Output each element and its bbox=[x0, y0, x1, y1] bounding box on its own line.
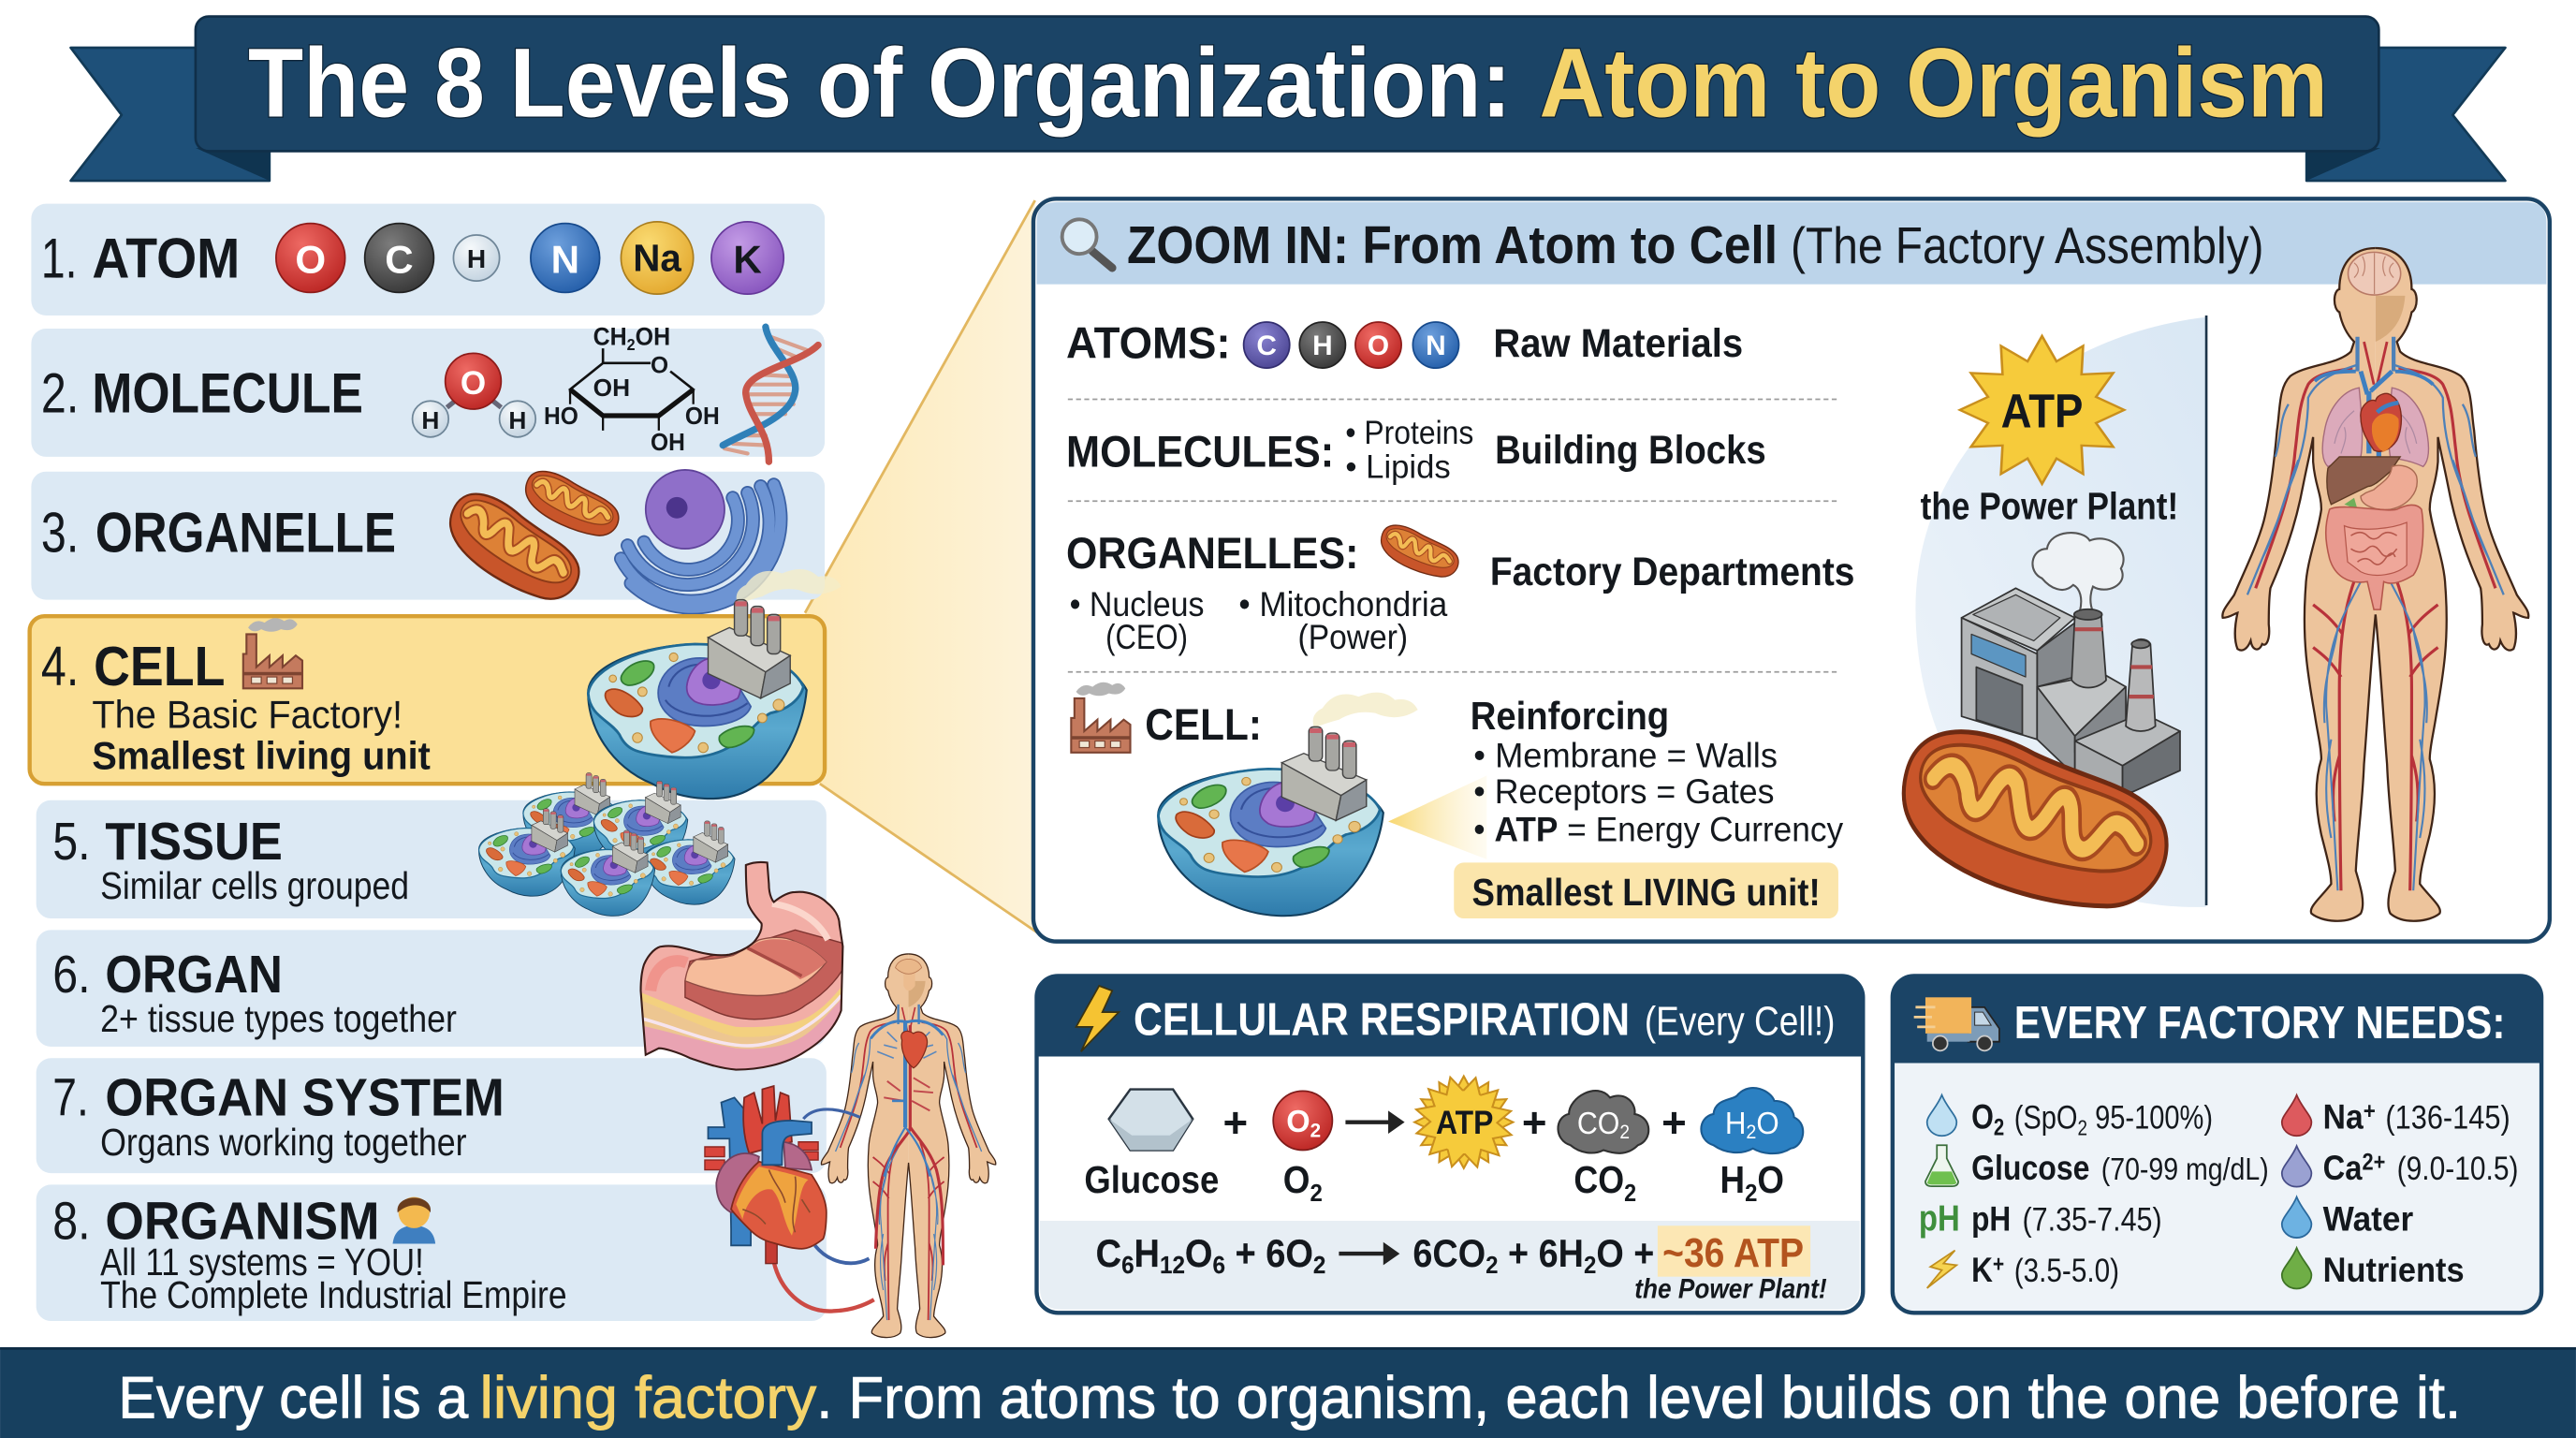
item: nutrients bbox=[2282, 1248, 2465, 1289]
icon: magnifier bbox=[1062, 219, 1112, 268]
row: organelles: (Power) bbox=[1298, 618, 1408, 656]
item: pH: (7.35-7.45) bbox=[2022, 1202, 2162, 1239]
formula: 6CO bbox=[1412, 1232, 1492, 1275]
row: molecules: • Lipids bbox=[1345, 449, 1451, 486]
formula: + 6H bbox=[1499, 1232, 1584, 1275]
smoke cloud bbox=[2032, 533, 2124, 611]
icon: ATP burst: ATP bbox=[1436, 1105, 1493, 1141]
level 6: organ: 6. bbox=[52, 945, 91, 1004]
item: pH: pH bbox=[1971, 1200, 2011, 1239]
glucose ring: OH bbox=[636, 322, 670, 351]
ATP star: ATP bbox=[2001, 384, 2083, 437]
factory building bbox=[1962, 588, 2180, 792]
icon: CO2 cloud: CO bbox=[1577, 1107, 1624, 1141]
illustration: stomach bbox=[633, 855, 846, 1077]
row: organelles: • Nucleus bbox=[1070, 585, 1204, 624]
glucose ring: OH bbox=[685, 402, 720, 430]
water molecule: H bbox=[508, 406, 526, 434]
plus signs: + bbox=[1223, 1098, 1248, 1146]
zoom funnel bbox=[805, 200, 1038, 933]
icon: CO2 cloud: 2 bbox=[1619, 1122, 1630, 1143]
item: O2: (SpO bbox=[2014, 1100, 2091, 1137]
icon: CO2 cloud bbox=[1558, 1091, 1648, 1153]
icon: ATP burst bbox=[1404, 1065, 1523, 1180]
icon: person bbox=[393, 1197, 435, 1244]
glucose ring: HO bbox=[544, 402, 578, 430]
row: organelles: ORGANELLES: bbox=[1066, 529, 1358, 579]
item: Na+: + bbox=[2364, 1099, 2376, 1124]
level 8: organism: ORGANISM bbox=[105, 1191, 379, 1250]
level 4: cell: The Basic Factory! bbox=[92, 692, 402, 736]
item: Ca2+ bbox=[2282, 1146, 2519, 1187]
row: atoms bbox=[1066, 319, 1743, 369]
footer text: living factory bbox=[480, 1366, 817, 1431]
formula: 12 bbox=[1160, 1251, 1185, 1279]
ribbon tails bbox=[71, 48, 2505, 181]
level 8: organism: 8. bbox=[52, 1191, 91, 1250]
level 4: cell: CELL bbox=[94, 635, 225, 697]
water molecule: O bbox=[461, 365, 486, 402]
glucose ring: OH bbox=[651, 428, 685, 456]
item: Ca2+: (9.0-10.5) bbox=[2397, 1151, 2519, 1187]
panel: cellular respiration: (Every Cell!) bbox=[1645, 999, 1835, 1045]
title text: The 8 Levels of Organization: bbox=[248, 29, 1512, 139]
plus signs: + bbox=[1522, 1098, 1547, 1146]
labels: O bbox=[1283, 1158, 1312, 1201]
icon: H2O cloud: O bbox=[1756, 1107, 1779, 1141]
icon: H2O cloud bbox=[1701, 1088, 1803, 1153]
row: atoms: C bbox=[1256, 330, 1277, 361]
level 8: organism bbox=[37, 1184, 827, 1321]
header bbox=[1893, 976, 2541, 1064]
formula: the Power Plant! bbox=[1634, 1273, 1827, 1304]
illustration: heart with connectors bbox=[705, 1086, 874, 1312]
level 4: cell: Smallest living unit bbox=[92, 733, 431, 777]
water molecule bbox=[413, 353, 535, 437]
row: organelles bbox=[1066, 521, 1854, 656]
plus signs: + bbox=[1661, 1098, 1687, 1146]
labels: 2 bbox=[1624, 1179, 1636, 1207]
item: glucose: (70-99 mg/dL) bbox=[2101, 1152, 2269, 1187]
row: atoms: O bbox=[1368, 330, 1389, 361]
item: K+: K bbox=[1971, 1251, 1997, 1289]
icon: O2 bbox=[1273, 1091, 1332, 1151]
illustration: cell with factory bbox=[588, 569, 842, 799]
item: water: Water bbox=[2323, 1200, 2413, 1239]
level 3: organelle bbox=[31, 465, 825, 613]
item: K+: + bbox=[1993, 1252, 2004, 1277]
level 2: molecule: 2. bbox=[41, 361, 79, 425]
plus signs bbox=[1223, 1098, 1687, 1146]
level 7: organ system: Organs working together bbox=[100, 1121, 466, 1164]
icon: O2: 2 bbox=[1310, 1120, 1321, 1141]
nucleus and ER bbox=[621, 470, 781, 608]
row: atoms: N bbox=[1426, 330, 1446, 361]
level 8: organism: The Complete Industrial Empire bbox=[100, 1273, 567, 1316]
item: O2: 2 bbox=[1994, 1116, 2004, 1141]
atoms row: C bbox=[385, 237, 414, 281]
panel: zoom in: ZOOM IN: From Atom to Cell bbox=[1127, 215, 1778, 274]
formula: 6 bbox=[1121, 1251, 1134, 1279]
row: cell: Reinforcing bbox=[1471, 694, 1669, 738]
level 5: tissue: 5. bbox=[52, 812, 91, 871]
item: Na+: (136-145) bbox=[2385, 1100, 2510, 1137]
item: Na+: Na bbox=[2323, 1098, 2367, 1137]
item: glucose bbox=[1925, 1145, 2269, 1187]
row: organelles: Factory Departments bbox=[1490, 550, 1854, 594]
level 7: organ system bbox=[37, 1058, 827, 1173]
level 5: tissue: TISSUE bbox=[105, 812, 283, 871]
level 6: organ bbox=[37, 930, 827, 1047]
footer text bbox=[118, 1366, 2461, 1431]
item: pH bbox=[1919, 1199, 2162, 1240]
footer banner bbox=[0, 1347, 2576, 1438]
panel: every factory needs: EVERY FACTORY NEEDS: bbox=[2014, 998, 2505, 1049]
row: cell: • Membrane = Walls bbox=[1473, 737, 1778, 775]
panel: zoom in: (The Factory Assembly) bbox=[1791, 217, 2263, 274]
header bbox=[1036, 976, 1863, 1056]
water molecule: H bbox=[421, 406, 439, 434]
item: K+: (3.5-5.0) bbox=[2014, 1253, 2119, 1289]
level 1: atom bbox=[31, 204, 825, 315]
power plant area bbox=[1884, 315, 2206, 927]
formula: C bbox=[1096, 1232, 1123, 1275]
icon: H2O cloud: 2 bbox=[1746, 1122, 1756, 1143]
level 6: organ: ORGAN bbox=[105, 945, 283, 1004]
row: atoms: H bbox=[1312, 330, 1333, 361]
glucose ring: OH bbox=[593, 374, 630, 402]
item: O2: 2 bbox=[2078, 1116, 2087, 1140]
illustration: organism body bbox=[821, 954, 996, 1338]
item: O2 bbox=[1927, 1095, 2213, 1141]
power plant area: the Power Plant! bbox=[1921, 485, 2178, 528]
icon: truck bbox=[1914, 997, 1999, 1050]
atoms row bbox=[276, 222, 783, 294]
level 5: tissue bbox=[37, 800, 827, 918]
glucose ring: CH bbox=[593, 322, 630, 351]
level 1: atom: 1. bbox=[41, 227, 78, 290]
formula: O + bbox=[1596, 1232, 1654, 1275]
ATP star bbox=[1960, 336, 2124, 484]
illustration: tissue cells bbox=[479, 773, 735, 916]
atoms row: H bbox=[467, 244, 486, 273]
icon: O2: O bbox=[1286, 1105, 1310, 1139]
glucose ring: 2 bbox=[627, 335, 636, 354]
row: atoms: ATOMS: bbox=[1066, 319, 1231, 369]
item: Na+ bbox=[2282, 1095, 2510, 1137]
formula: 6 bbox=[1212, 1251, 1225, 1279]
row: cell: • Receptors = Gates bbox=[1473, 772, 1774, 811]
level 4: cell: 4. bbox=[41, 635, 79, 697]
atoms row: K bbox=[733, 237, 762, 281]
row: organelles: • Mitochondria bbox=[1238, 585, 1448, 624]
labels: 2 bbox=[1745, 1179, 1757, 1207]
illustration: human body bbox=[2222, 248, 2528, 921]
icon: lightning bbox=[1076, 986, 1119, 1051]
formula: 2 bbox=[1486, 1251, 1499, 1279]
level 2: molecule bbox=[31, 322, 825, 462]
labels: CO bbox=[1573, 1158, 1631, 1201]
row: cell: • ATP = Energy Currency bbox=[1473, 811, 1844, 849]
atoms row: O bbox=[295, 237, 326, 281]
glucose ring bbox=[544, 322, 720, 456]
glucose ring: O bbox=[651, 353, 668, 378]
formula: H bbox=[1134, 1232, 1160, 1275]
row: molecules: • Proteins bbox=[1345, 415, 1473, 451]
formula: + 6O bbox=[1225, 1232, 1313, 1275]
formula: ~36 ATP bbox=[1662, 1230, 1804, 1276]
DNA helix bbox=[723, 327, 818, 462]
item: O2: O bbox=[1971, 1098, 1998, 1137]
item: O2: 95-100%) bbox=[2087, 1100, 2213, 1137]
labels: O bbox=[1757, 1158, 1784, 1201]
equation band bbox=[1040, 1221, 1860, 1310]
item: glucose: Glucose bbox=[1971, 1149, 2089, 1187]
row: cell bbox=[1071, 682, 1844, 918]
panel: every factory needs bbox=[1893, 976, 2541, 1313]
atoms row: Na bbox=[633, 237, 681, 280]
labels: 2 bbox=[1310, 1179, 1323, 1207]
level 4: cell bbox=[30, 616, 825, 784]
level 3: organelle: 3. bbox=[41, 501, 79, 565]
row: organelles: (CEO) bbox=[1105, 618, 1188, 656]
callout: smallest living unit: Smallest LIVING unit! bbox=[1472, 871, 1821, 914]
item: nutrients: Nutrients bbox=[2323, 1251, 2465, 1289]
item: Ca2+: 2+ bbox=[2362, 1151, 2385, 1176]
level 3: organelle: ORGANELLE bbox=[95, 501, 396, 565]
item: K+ bbox=[1927, 1251, 2119, 1289]
title banner bbox=[196, 17, 2378, 151]
arrow bbox=[1345, 1110, 1405, 1134]
panel: zoom in bbox=[1033, 198, 2550, 942]
icon: factory bbox=[243, 618, 302, 688]
level 7: organ system: 7. bbox=[52, 1068, 89, 1127]
item: Ca2+: Ca bbox=[2323, 1149, 2367, 1187]
row: atoms: Raw Materials bbox=[1493, 321, 1743, 366]
row: cell: CELL: bbox=[1145, 700, 1262, 750]
level 6: organ: 2+ tissue types together bbox=[100, 997, 457, 1040]
level 8: organism: All 11 systems = YOU! bbox=[100, 1240, 424, 1284]
panel header bbox=[1036, 202, 2546, 285]
formula bbox=[1096, 1225, 1827, 1304]
level 7: organ system: ORGAN SYSTEM bbox=[105, 1068, 505, 1127]
formula: 2 bbox=[1584, 1251, 1596, 1279]
labels: H bbox=[1720, 1158, 1748, 1201]
level 5: tissue: Similar cells grouped bbox=[100, 864, 409, 907]
labels: Glucose bbox=[1084, 1158, 1219, 1201]
item: water bbox=[2282, 1197, 2413, 1239]
labels bbox=[1084, 1158, 1784, 1207]
row: molecules bbox=[1066, 415, 1766, 486]
level 1: atom: ATOM bbox=[92, 227, 240, 290]
big mitochondrion bbox=[1884, 717, 2184, 927]
formula: O bbox=[1185, 1232, 1212, 1275]
row: molecules: Building Blocks bbox=[1495, 428, 1766, 473]
footer text: Every cell is a bbox=[118, 1366, 469, 1431]
footer text: . From atoms to organism, each level builds on the one before it. bbox=[816, 1366, 2461, 1431]
atoms row: N bbox=[551, 237, 579, 281]
title highlight: Atom to Organism bbox=[1540, 29, 2328, 139]
row: molecules: MOLECULES: bbox=[1066, 427, 1334, 477]
mitochondria bbox=[434, 465, 626, 613]
panel: cellular respiration: CELLULAR RESPIRATION bbox=[1134, 995, 1630, 1046]
item: pH: pH bbox=[1919, 1199, 1960, 1240]
icon: H2O cloud: H bbox=[1725, 1107, 1748, 1141]
icon: glucose hexagon bbox=[1109, 1090, 1193, 1151]
panel: cellular respiration bbox=[1036, 976, 1863, 1313]
formula: 2 bbox=[1313, 1251, 1325, 1279]
level 2: molecule: MOLECULE bbox=[92, 361, 363, 425]
